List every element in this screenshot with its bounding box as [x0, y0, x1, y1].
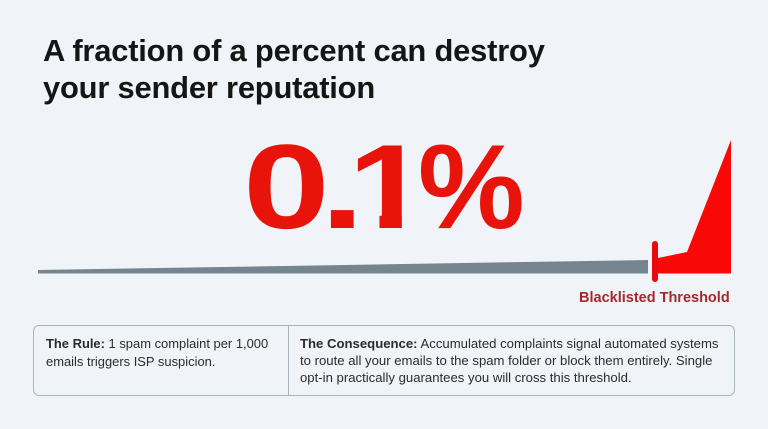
- info panel: [33, 325, 735, 396]
- text: the rule: The Rule: 1 spam complaint per 1,000: [46, 336, 268, 351]
- title: A fraction of a percent can destroy: [43, 33, 545, 68]
- threshold label: Blacklisted Threshold: [579, 290, 730, 306]
- big percentage figure: 0: [243, 120, 329, 254]
- text: the rule: [46, 336, 268, 369]
- big percentage figure: .: [320, 120, 364, 254]
- threshold marker: [652, 241, 658, 282]
- big percentage figure: 1: [348, 120, 429, 254]
- text: the consequence: to route all your emails to the spam folder or block them entirely. Single: [300, 353, 712, 368]
- text: the consequence: [300, 336, 718, 385]
- red spike: [655, 140, 731, 274]
- text: the consequence: The Consequence: Accumulated complaints signal automated systems: [300, 336, 718, 351]
- text: the consequence: opt-in practically guarantees you will cross this threshold.: [300, 370, 632, 385]
- big percentage figure: %: [418, 120, 525, 254]
- title: your sender reputation: [43, 70, 375, 105]
- grey rising line: [38, 260, 648, 274]
- panel divider: [288, 326, 289, 395]
- title: [43, 33, 545, 105]
- big percentage figure: [243, 120, 525, 254]
- text: the rule: emails triggers ISP suspicion.: [46, 354, 215, 369]
